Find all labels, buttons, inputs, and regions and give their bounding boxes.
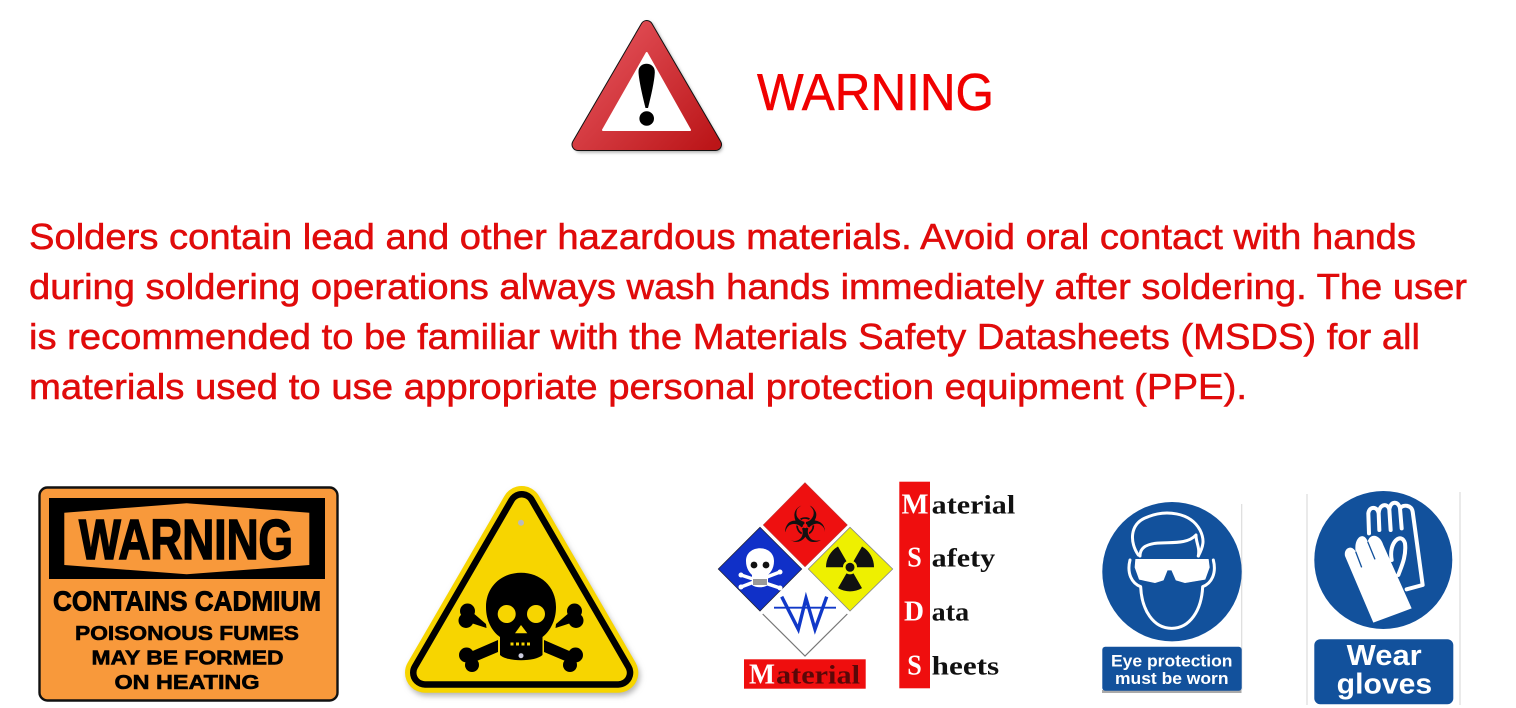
icon: hazard diamond <box>718 483 893 690</box>
text block: hazard warning paragraph <box>29 216 1467 407</box>
blue diamond with skull <box>718 527 802 611</box>
white diamond with W symbol <box>763 572 847 656</box>
icon: yellow skull and crossbones sign <box>425 506 620 676</box>
red diamond with biohazard symbol: ☣ <box>783 496 827 554</box>
panel: eye protection sign <box>1102 502 1242 692</box>
panel: eye protection sign: must be worn <box>1115 669 1228 688</box>
panel: MSDS acronym: S <box>907 542 922 574</box>
icon: gloves <box>1345 503 1423 623</box>
panel: MSDS acronym: M <box>902 488 928 520</box>
panel: wear gloves sign <box>1307 491 1460 705</box>
panel: cadmium warning sign <box>40 488 338 700</box>
text block: hazard warning paragraph: Solders contain lead and other hazardous materials. Avoid oral contact with hands <box>29 216 1416 257</box>
panel: MSDS acronym: D <box>904 596 924 628</box>
panel: MSDS acronym: afety <box>932 544 995 573</box>
panel: MSDS acronym: ata <box>932 598 969 627</box>
panel: wear gloves sign: gloves <box>1337 668 1432 700</box>
panel: MSDS acronym: S <box>907 649 922 681</box>
panel: cadmium warning sign: MAY BE FORMED <box>92 648 284 670</box>
Material label: aterial <box>776 660 860 690</box>
panel: cadmium warning sign: POISONOUS FUMES <box>75 623 299 645</box>
text block: hazard warning paragraph: during soldering operations always wash hands immediately after soldering. The user <box>29 266 1467 307</box>
panel: cadmium warning sign: CONTAINS CADMIUM <box>53 586 321 616</box>
red diamond with biohazard symbol <box>763 483 847 567</box>
panel: MSDS acronym: aterial <box>932 490 1015 519</box>
text block: hazard warning paragraph: is recommended to be familiar with the Materials Safety Datasheets (MSDS) for all <box>29 316 1420 357</box>
panel: eye protection sign: Eye protection <box>1111 652 1232 671</box>
yellow diamond with radiation symbol <box>808 527 893 611</box>
panel: cadmium warning sign: WARNING <box>79 508 293 572</box>
panel: MSDS acronym: heets <box>932 651 999 680</box>
panel: MSDS acronym <box>899 482 1015 688</box>
icon: face with goggles <box>1129 513 1214 628</box>
heading: WARNING: WARNING <box>757 64 994 122</box>
panel: cadmium warning sign: ON HEATING <box>114 672 260 694</box>
Material label <box>744 658 866 690</box>
icon: red warning triangle <box>578 26 716 146</box>
Material label: M <box>749 658 775 690</box>
panel: wear gloves sign: Wear <box>1347 640 1422 672</box>
text block: hazard warning paragraph: materials used to use appropriate personal protection equipment (PPE). <box>29 366 1247 407</box>
